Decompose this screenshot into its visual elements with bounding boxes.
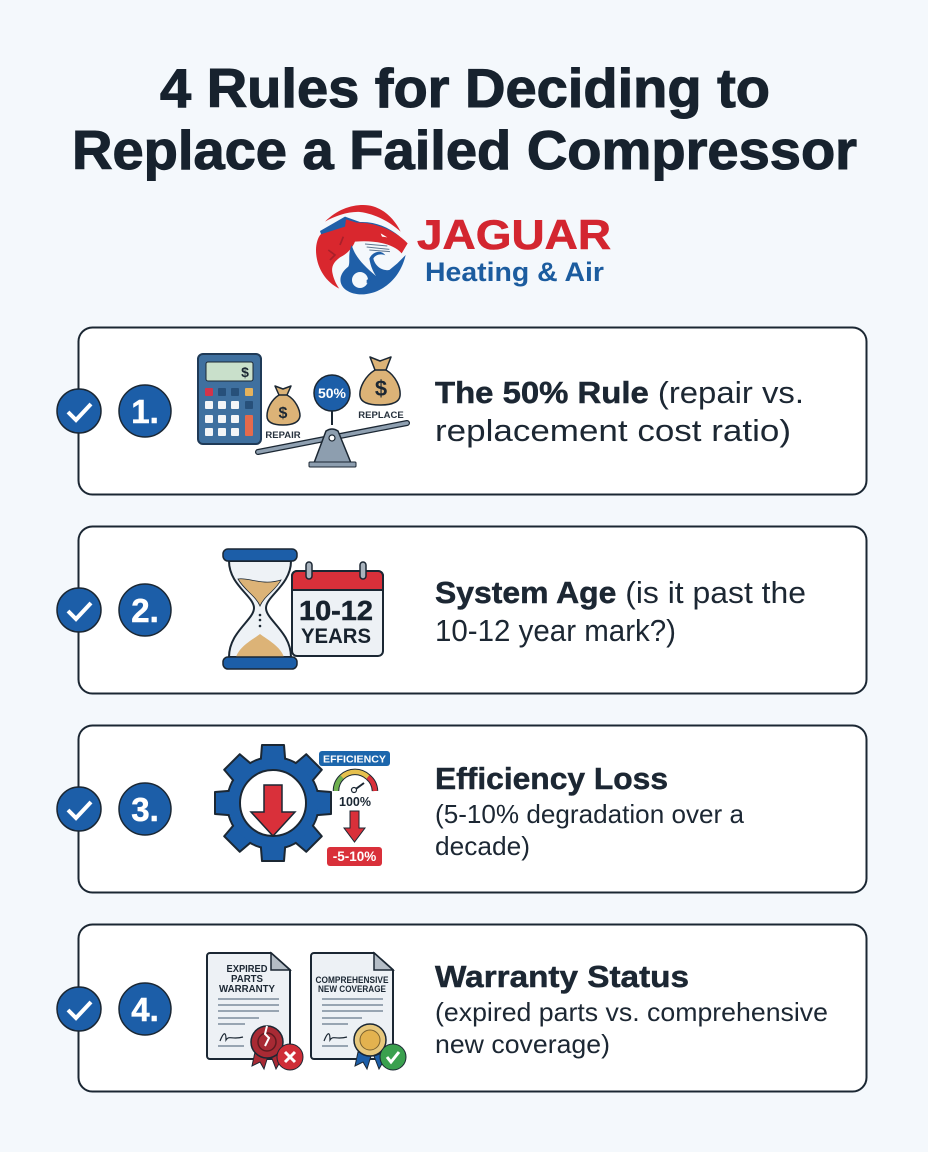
icon: repair money bag: REPAIR: [265, 430, 301, 441]
rule 4 text: Warranty Status: [435, 959, 689, 994]
icon: calendar 10-12 years: [292, 562, 383, 656]
number badge 3: [119, 783, 171, 835]
number badge 2: 2.: [131, 592, 159, 629]
icon: calendar 10-12 years: 10-12: [299, 595, 373, 626]
icon: replace money bag: $: [375, 376, 387, 401]
rule 1 text: replacement cost ratio): [435, 413, 791, 448]
icon: calculator: $: [241, 364, 249, 380]
number badge 4: [119, 983, 171, 1035]
check badge 1: [57, 389, 101, 433]
rule 3 text: Efficiency Loss: [435, 761, 668, 796]
panel: rule 3: [57, 726, 866, 892]
icon: efficiency gauge: [336, 772, 375, 809]
check badge 2: [57, 588, 101, 632]
icon: replace money bag: [358, 357, 404, 421]
icon: replace money bag: REPLACE: [358, 410, 404, 421]
card 3: [78, 726, 866, 892]
icon: new coverage document: NEW COVERAGE: [318, 984, 386, 994]
loss badge: [327, 847, 382, 866]
rule 1 text: [435, 375, 804, 448]
check badge 3: [57, 787, 101, 831]
panel: rule 1: [57, 328, 866, 494]
rule 4 text: [435, 959, 828, 1059]
card 1: [78, 328, 866, 494]
number badge 2: [119, 584, 171, 636]
icon: new coverage document: [311, 953, 406, 1070]
icon: gear with down arrow: [215, 745, 331, 861]
arrow: small down arrow: [344, 811, 365, 842]
number badge 1: [119, 385, 171, 437]
rule 3 text: [435, 761, 745, 861]
title: Replace a Failed Compressor: [72, 119, 857, 181]
icon: hourglass: [223, 549, 297, 669]
check badge 4: [57, 987, 101, 1031]
icon: repair money bag: [265, 386, 301, 441]
logo wordmark: Heating & Air: [425, 257, 605, 287]
efficiency label: EFFICIENCY: [323, 754, 386, 766]
rule 1 text: The 50% Rule (repair vs.: [435, 375, 804, 410]
icon: expired warranty document: PARTS: [231, 974, 263, 985]
rule 2 text: 10-12 year mark?): [435, 613, 676, 648]
card 4: [78, 924, 866, 1092]
rule 3 text: (5-10% degradation over a: [435, 799, 745, 829]
icon: repair money bag: $: [279, 405, 288, 422]
number badge 4: 4.: [131, 991, 159, 1028]
title: [72, 57, 857, 181]
panel: rule 2: [57, 526, 866, 694]
icon: expired warranty document: [207, 953, 303, 1070]
icon: balance scale: 50%: [318, 385, 347, 401]
rule 4 text: new coverage): [435, 1029, 610, 1059]
number badge 1: 1.: [131, 393, 159, 430]
icon: calendar 10-12 years: YEARS: [301, 625, 371, 648]
logo: Jaguar Heating & Air: [316, 205, 611, 294]
icon: expired warranty document: WARRANTY: [219, 984, 275, 995]
icon: balance scale: [258, 375, 407, 467]
panel: rule 4: [57, 924, 866, 1092]
icon: new coverage document: COMPREHENSIVE: [316, 975, 388, 985]
rule 3 text: decade): [435, 831, 530, 861]
title: 4 Rules for Deciding to: [160, 57, 770, 119]
icon: calculator: [198, 354, 261, 444]
card 2: [78, 526, 866, 694]
icon: expired warranty document: EXPIRED: [226, 964, 268, 975]
rule 2 text: System Age (is it past the: [435, 575, 806, 610]
logo emblem: [316, 205, 408, 294]
logo wordmark: [417, 211, 611, 287]
rule 2 text: [435, 575, 806, 648]
loss badge: -5-10%: [333, 849, 376, 864]
icon: efficiency gauge: 100%: [339, 795, 371, 809]
rule 4 text: (expired parts vs. comprehensive: [435, 997, 828, 1027]
number badge 3: 3.: [131, 791, 159, 828]
logo wordmark: JAGUAR: [417, 211, 611, 258]
